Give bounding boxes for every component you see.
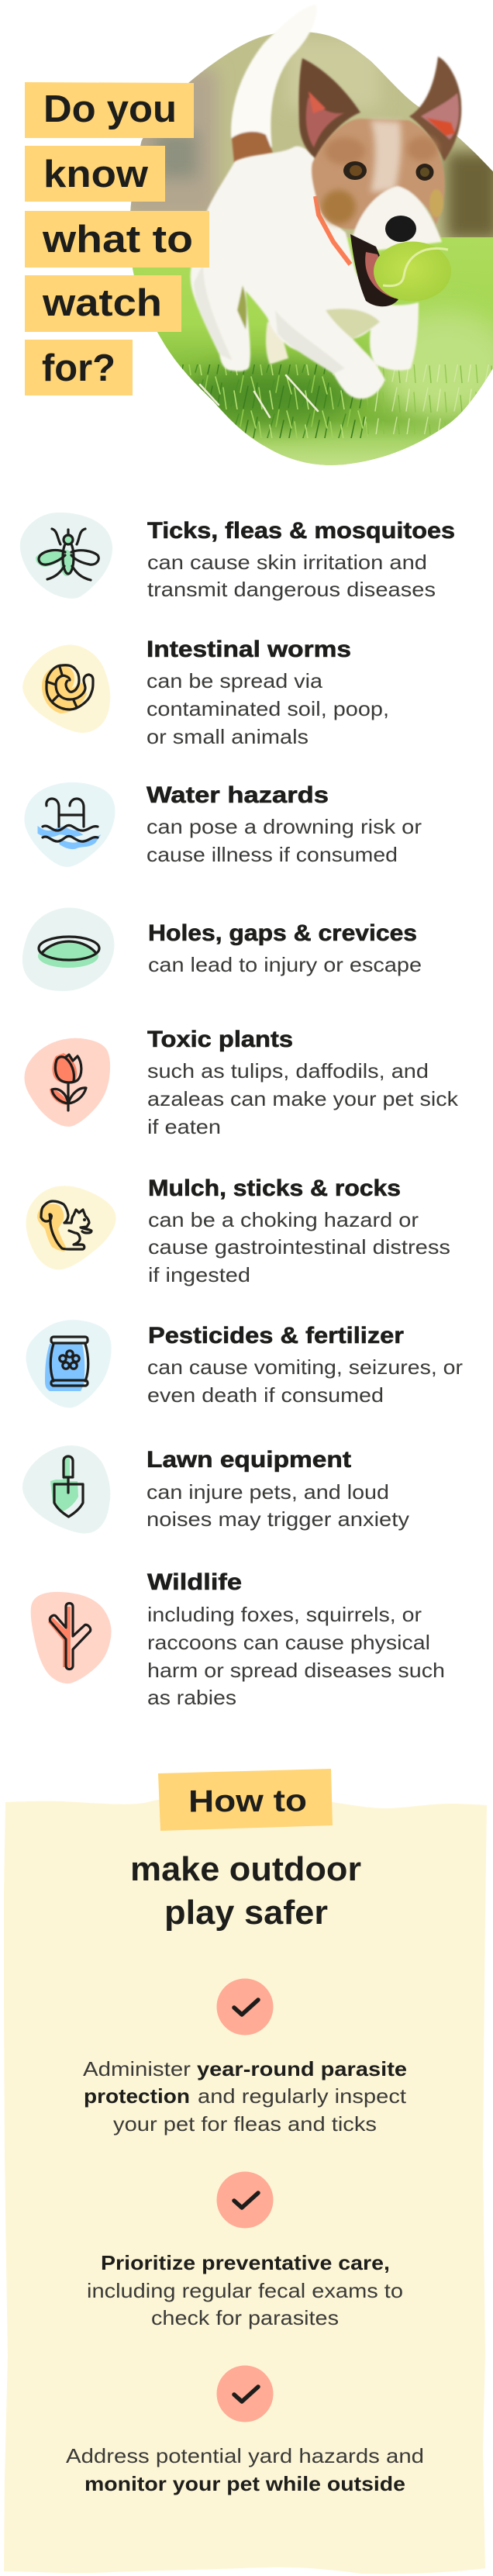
- heading: Water hazards: [147, 782, 329, 808]
- heading: Ticks, fleas & mosquitoes: [147, 518, 455, 544]
- item: wildlife: [31, 1569, 445, 1709]
- heading: Pesticides & fertilizer: [148, 1323, 404, 1348]
- heading: Lawn equipment: [147, 1447, 351, 1473]
- heading: Toxic plants: [147, 1027, 293, 1052]
- tip 1: protection: [84, 2084, 190, 2108]
- heading: Intestinal worms: [147, 637, 351, 662]
- description: transmit dangerous diseases: [147, 578, 436, 601]
- description: can be a choking hazard or: [148, 1208, 419, 1231]
- heading: Mulch, sticks & rocks: [148, 1176, 401, 1201]
- description: noises may trigger anxiety: [147, 1507, 409, 1531]
- description: such as tulips, daffodils, and: [147, 1059, 429, 1083]
- tip 2: [87, 2251, 403, 2329]
- item: pesticides and fertilizer: [26, 1320, 463, 1408]
- panel heading: play safer: [164, 1894, 328, 1932]
- description: or small animals: [147, 725, 309, 748]
- title on yellow tape strips: know: [43, 154, 149, 195]
- description: even death if consumed: [147, 1383, 384, 1407]
- description: if ingested: [148, 1263, 250, 1286]
- title on yellow tape strips: Do you: [43, 88, 177, 130]
- description: can lead to injury or escape: [148, 953, 422, 976]
- panel: how to make outdoor play safer: [4, 1769, 487, 2574]
- description: azaleas can make your pet sick: [147, 1087, 459, 1110]
- description: cause illness if consumed: [147, 843, 398, 866]
- item: mulch, sticks and rocks: [26, 1176, 450, 1286]
- description: harm or spread diseases such: [147, 1659, 445, 1682]
- dog head: [312, 119, 445, 252]
- title on yellow tape strips: what to: [42, 219, 193, 261]
- tip 3: monitor your pet while outside: [84, 2472, 405, 2495]
- tip 1: Administer: [83, 2057, 191, 2080]
- icon: tulip: [24, 1038, 110, 1127]
- dog mouth: [350, 234, 398, 306]
- photo background blob: [124, 31, 493, 473]
- check icon 1: [217, 1979, 273, 2035]
- tip 3: [66, 2444, 424, 2495]
- icon: fertilizer bag: [26, 1320, 112, 1408]
- description: [147, 669, 389, 748]
- tip 1: and regularly inspect: [198, 2084, 407, 2108]
- tip 1: your pet for fleas and ticks: [113, 2112, 377, 2136]
- hero photo: dog with tennis ball in a blob: [124, 5, 493, 473]
- description: [147, 1355, 463, 1407]
- item: water hazards: [24, 782, 422, 867]
- panel heading: [130, 1850, 361, 1932]
- description: contaminated soil, poop,: [147, 697, 389, 720]
- icon: worm: [22, 644, 110, 733]
- description: [147, 815, 422, 866]
- dog eyes: [343, 161, 434, 181]
- dog body: [191, 147, 419, 399]
- check icon 3: [217, 2365, 273, 2422]
- description: can injure pets, and loud: [147, 1480, 389, 1504]
- how to label: [158, 1769, 333, 1831]
- description: as rabies: [147, 1686, 236, 1709]
- dog ears: [298, 57, 461, 161]
- item: holes, gaps and crevices: [22, 907, 422, 991]
- description: can pose a drowning risk or: [147, 815, 422, 838]
- panel heading: make outdoor: [130, 1850, 361, 1888]
- description: [147, 551, 436, 601]
- item: intestinal worms: [22, 637, 389, 748]
- icon: shovel: [22, 1445, 110, 1534]
- item: toxic plants: [24, 1027, 459, 1138]
- title on yellow tape strips: for?: [42, 347, 115, 389]
- dog collar: [315, 196, 350, 264]
- how to label: How to: [188, 1784, 307, 1819]
- description: [147, 1480, 409, 1531]
- tip 1: [83, 2057, 407, 2136]
- icon: pool ladder: [24, 782, 115, 867]
- dog nose: [385, 216, 416, 242]
- tip 1: year-round parasite: [197, 2057, 407, 2080]
- description: can be spread via: [147, 669, 323, 692]
- tip 2: including regular fecal exams to: [87, 2279, 403, 2302]
- title on yellow tape strips: watch: [42, 282, 162, 324]
- check icon 2: [217, 2171, 273, 2229]
- description: including foxes, squirrels, or: [147, 1603, 422, 1626]
- icon: branch: [31, 1592, 112, 1683]
- description: [148, 1208, 450, 1286]
- description: if eaten: [147, 1115, 221, 1138]
- icon: hole: [22, 907, 115, 991]
- dog tail: [231, 5, 316, 163]
- icon: squirrel: [26, 1186, 116, 1269]
- description: cause gastrointestinal distress: [148, 1235, 450, 1259]
- heading: Wildlife: [147, 1569, 242, 1595]
- tip 3: Address potential yard hazards and: [66, 2444, 424, 2467]
- title on yellow tape strips: [25, 82, 209, 395]
- description: can cause skin irritation and: [147, 551, 427, 574]
- heading: Holes, gaps & crevices: [148, 920, 417, 946]
- description: can cause vomiting, seizures, or: [147, 1355, 463, 1379]
- item: lawn equipment: [22, 1445, 409, 1534]
- tennis ball: [374, 242, 451, 301]
- tip 2: check for parasites: [151, 2306, 339, 2329]
- description: [147, 1059, 459, 1138]
- icon: mosquito: [20, 513, 112, 599]
- tip 2: Prioritize preventative care,: [101, 2251, 390, 2274]
- item: ticks, fleas and mosquitoes: [20, 513, 455, 601]
- description: [147, 1603, 445, 1709]
- panel background: [4, 1800, 487, 2574]
- description: raccoons can cause physical: [147, 1631, 430, 1654]
